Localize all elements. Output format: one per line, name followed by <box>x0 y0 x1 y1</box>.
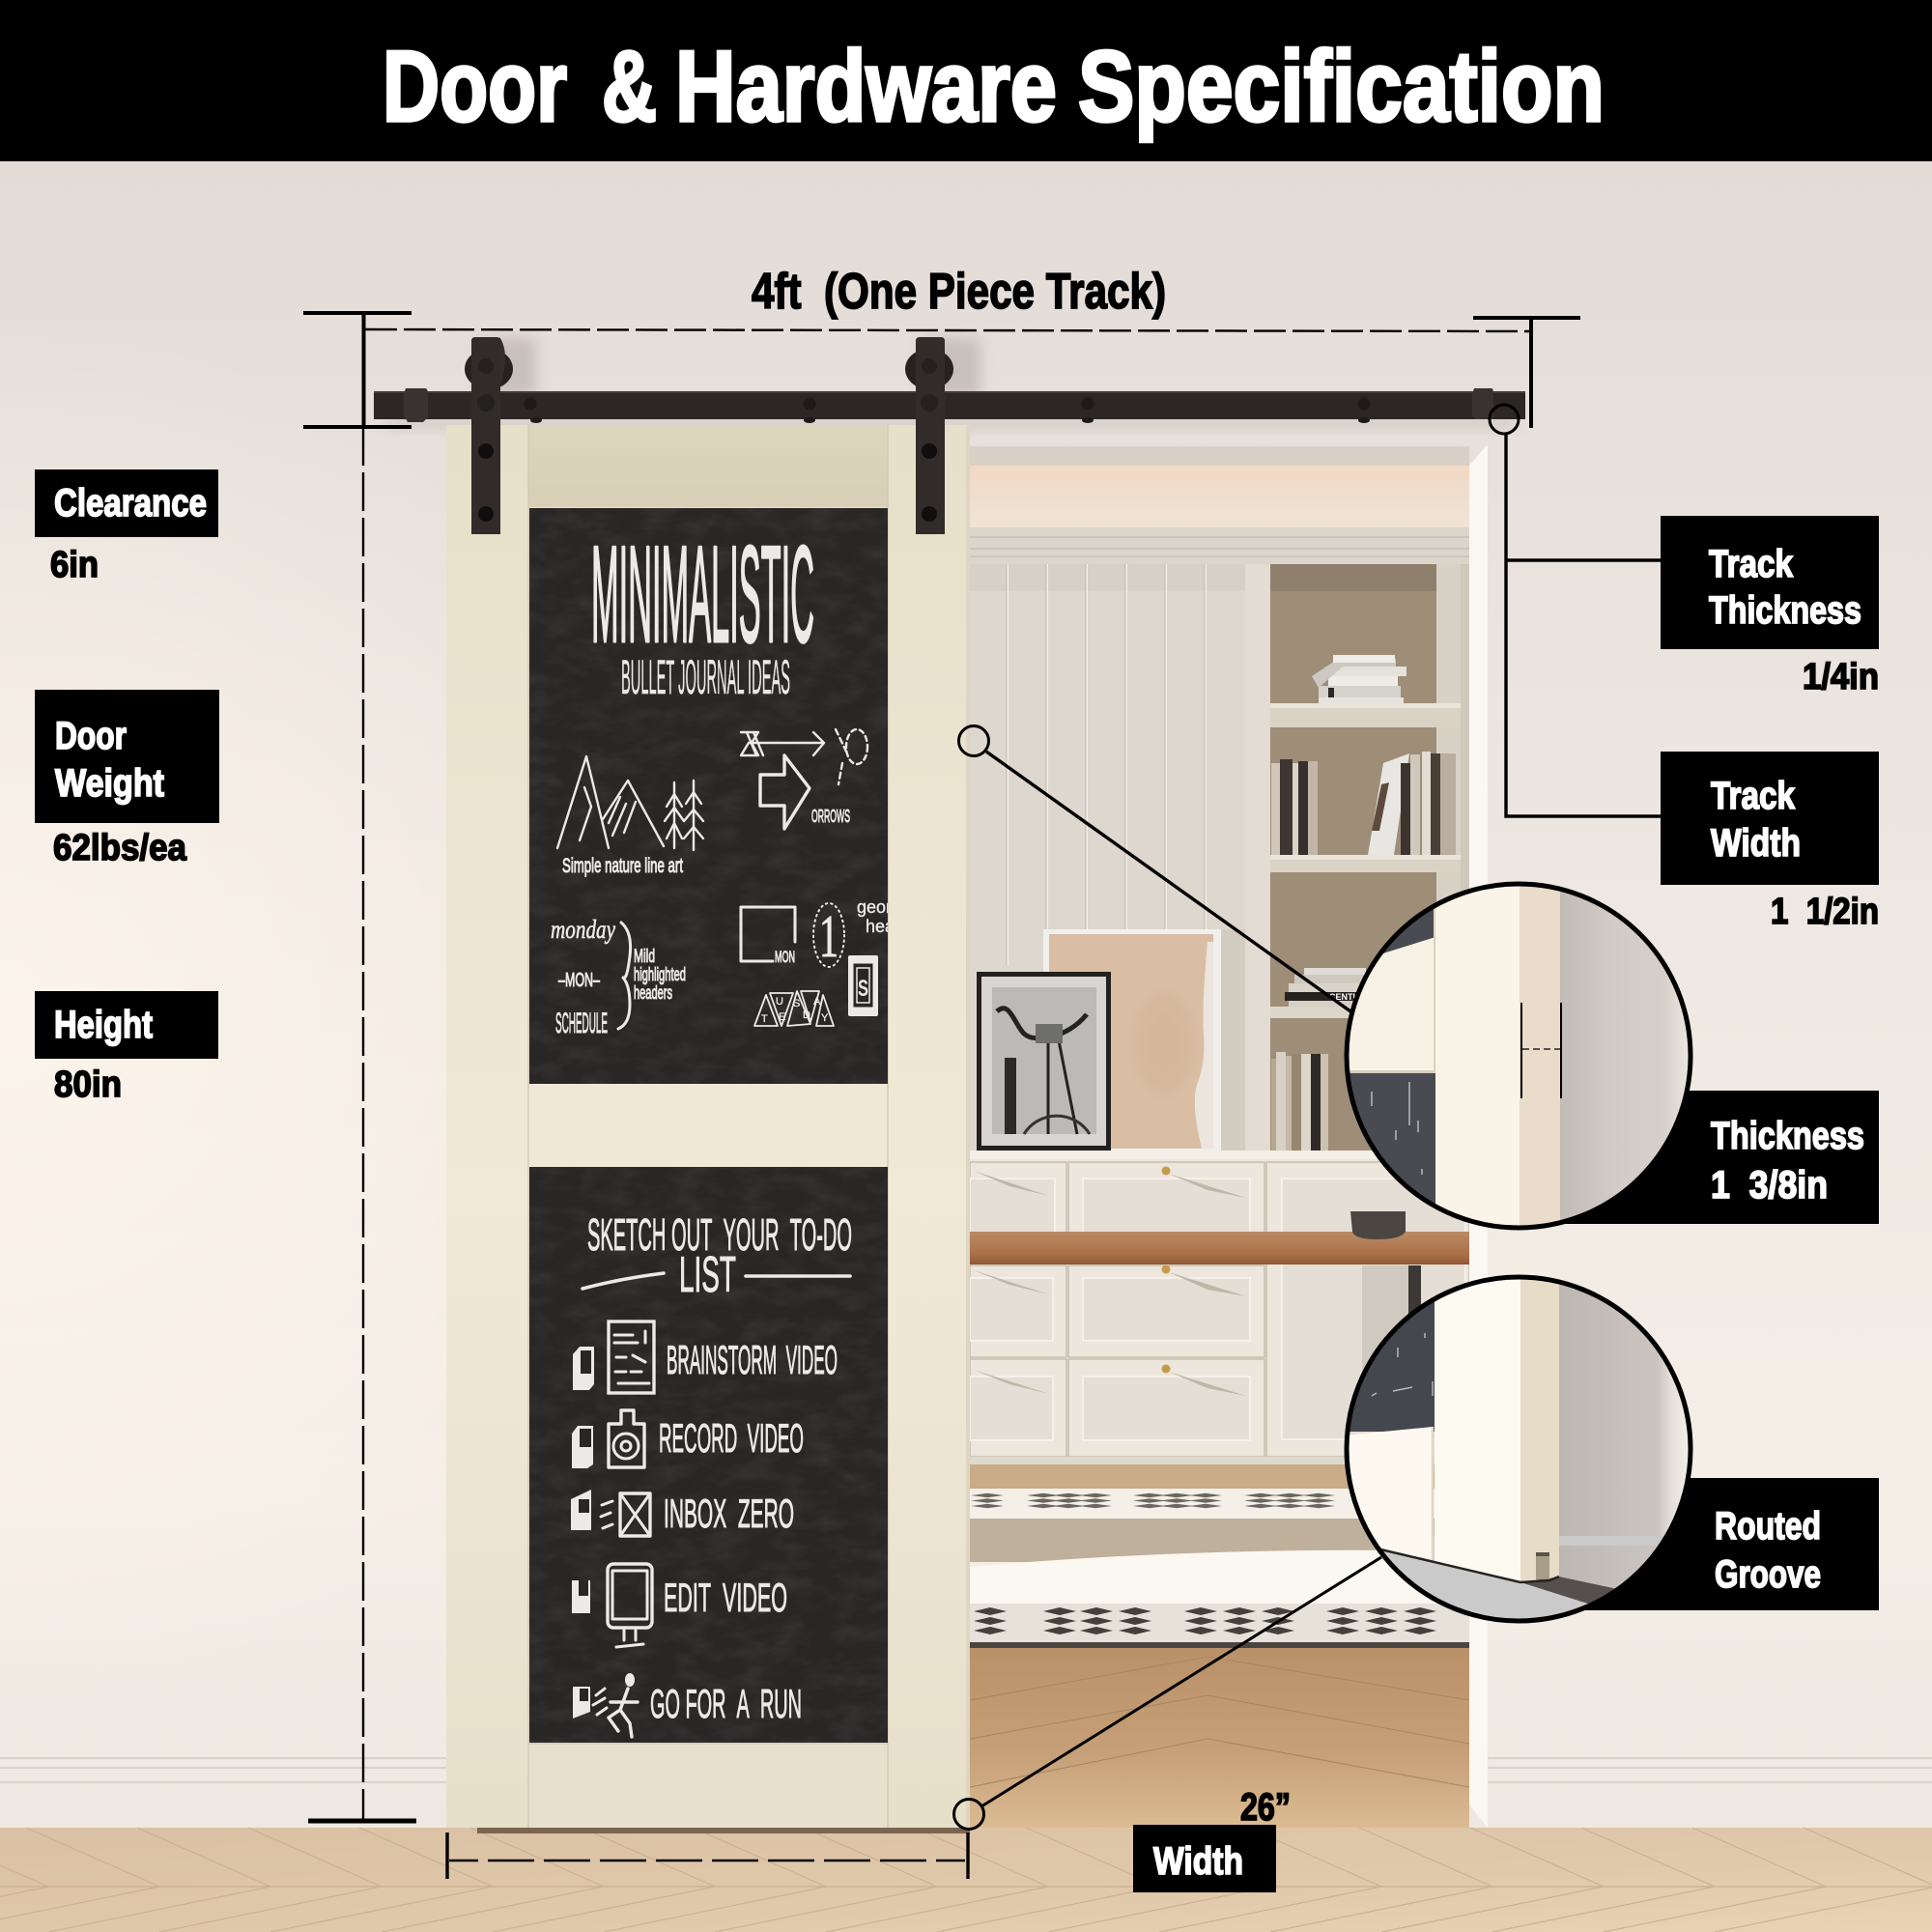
books shelf 4 <box>1271 1052 1328 1151</box>
label: width: Width <box>1153 1840 1243 1883</box>
floor and rug <box>970 1464 1469 1828</box>
detail circle: routed groove <box>1343 1092 1704 1633</box>
label: clearance <box>35 469 218 585</box>
stile in detail <box>1435 1273 1520 1582</box>
bottom rail in detail <box>1343 1427 1433 1560</box>
checkbox and icon: camera <box>572 1410 644 1468</box>
title <box>383 31 1605 143</box>
label: clearance: Clearance <box>54 482 207 525</box>
chalkboard: minimalistic: ORROWS <box>811 807 850 826</box>
label: routed groove: Groove <box>1715 1553 1821 1596</box>
text: MINIMALISTIC <box>591 518 814 671</box>
leader: routed groove detail <box>954 1557 1381 1830</box>
doodle: mon box: MON <box>775 948 795 966</box>
label: track thickness: Thickness <box>1709 589 1861 632</box>
chalkboard: to-do list: RECORD VIDEO <box>659 1415 804 1461</box>
doodle: tuesday pennants: U <box>776 996 783 1008</box>
chalkboard: minimalistic: SCHEDULE <box>555 1008 608 1039</box>
dimension: door height <box>362 427 364 1821</box>
books shelf 3: CENTU <box>1329 992 1359 1002</box>
drawer handle shadows <box>974 1171 1246 1396</box>
title: & <box>602 31 657 143</box>
dimension: track length <box>365 264 1580 428</box>
doodle: brace <box>618 923 631 1029</box>
door middle rail <box>528 1084 888 1166</box>
label: track width <box>1661 752 1879 932</box>
door top rail <box>528 425 888 507</box>
detail circle: door thickness <box>1343 879 1695 1233</box>
label: track width: Width <box>1711 822 1801 865</box>
framed bicycle photo <box>977 972 1111 1151</box>
sliding door <box>446 425 970 1828</box>
label: routed groove <box>1546 1478 1879 1610</box>
value: door weight: 62lbs/ea <box>53 828 187 868</box>
label: track length: 4ft (One Piece Track) <box>752 264 1166 320</box>
routed groove notch <box>1536 1552 1549 1579</box>
value: width: 26” <box>1240 1786 1291 1829</box>
chalkboard: minimalistic <box>529 508 933 1084</box>
title: Door <box>383 31 567 143</box>
door bottom rail <box>528 1744 888 1828</box>
books shelf 2 <box>1271 752 1456 855</box>
value: height: 80in <box>54 1065 122 1105</box>
lettering: geometric headers (cropped): geometric <box>857 897 933 917</box>
header bar <box>0 0 1932 161</box>
value: clearance: 6in <box>50 545 99 585</box>
doodle: tuesday pennants: E <box>779 1011 785 1023</box>
checkbox and icon: brainstorm <box>573 1321 654 1393</box>
door shadow on floor <box>477 1828 970 1833</box>
label: thickness <box>1546 1091 1879 1224</box>
right stopper <box>1472 388 1493 419</box>
label: door weight: Door <box>55 715 127 757</box>
sliding door: SKETCH OUT YOUR TO-DO <box>587 1209 852 1260</box>
dimension: clearance bracket <box>303 313 412 427</box>
lettering: geometric headers (cropped): headers <box>866 917 928 936</box>
baseboard <box>0 1758 1932 1782</box>
caption: simple nature line art: Simple nature line art <box>562 855 683 877</box>
door edge in detail <box>1520 1273 1559 1582</box>
books shelf 3 <box>1285 968 1366 1007</box>
checkbox and icon: monitor <box>572 1564 652 1647</box>
list underlines <box>582 1273 850 1289</box>
doodle: tuesday pennants: T <box>761 1013 768 1025</box>
doodle: dotted number one <box>813 903 844 970</box>
doodle: tuesday pennants: Y <box>821 1012 829 1024</box>
watercolor frame <box>1043 929 1245 1151</box>
floor in detail <box>1343 1536 1704 1633</box>
title: Hardware <box>675 31 1057 143</box>
label: track thickness: Track <box>1709 543 1794 585</box>
doodle: tuesday pennants: A <box>813 996 821 1008</box>
lettering: mild highlighted headers: Mild <box>634 947 655 967</box>
doodle: mountains and trees <box>557 756 703 850</box>
books shelf 1 <box>1312 655 1406 703</box>
lettering: monday: monday <box>551 915 615 944</box>
chalkboard: to-do list <box>529 1167 888 1743</box>
doodle: tuesday pennants <box>754 991 834 1026</box>
chalkboard: minimalistic: BULLET JOURNAL IDEAS <box>621 650 790 704</box>
leader: track callouts <box>1490 405 1661 816</box>
title: Specification <box>1078 31 1605 143</box>
lower cabinets <box>970 1151 1469 1464</box>
label: door weight <box>35 690 219 868</box>
floor <box>0 1828 1932 1932</box>
label: thickness: Thickness <box>1711 1115 1864 1157</box>
leader: thickness detail <box>958 726 1350 1011</box>
label: thickness: 1 3/8in <box>1711 1164 1828 1207</box>
mug <box>1350 1211 1406 1239</box>
hanger shadow on wall <box>386 338 1517 427</box>
lettering: mild highlighted headers <box>634 947 686 1004</box>
doodle: mon box <box>741 907 795 966</box>
label: track width: Track <box>1711 775 1796 817</box>
barn door track <box>374 388 1525 423</box>
lettering: geometric headers (cropped) <box>857 897 933 936</box>
label: door weight: Weight <box>55 762 164 805</box>
lettering: mild highlighted headers: highlighted <box>634 965 686 985</box>
chalkboard: to-do list: INBOX ZERO <box>664 1491 794 1536</box>
doodle: arrows <box>741 729 867 829</box>
list item: edit video: EDIT VIDEO <box>664 1575 787 1620</box>
value: track width: 1 1/2in <box>1771 892 1879 932</box>
dimension: door width <box>447 1833 969 1879</box>
door frame jamb <box>1469 446 1488 1828</box>
bookcase <box>1245 564 1469 1151</box>
checkbox and icon: runner <box>573 1673 638 1737</box>
label: track thickness <box>1661 516 1879 697</box>
value: track thickness: 1/4in <box>1803 657 1879 697</box>
left stopper <box>404 388 428 422</box>
lettering: mild highlighted headers: headers <box>634 983 672 1004</box>
beadboard wall <box>970 564 1245 1151</box>
label: height <box>35 991 218 1105</box>
doodle: tuesday pennants: S <box>793 998 800 1009</box>
doodle: s badge: S <box>858 976 868 1002</box>
lettering: mon: –MON– <box>558 970 601 991</box>
chalkboard: to-do list: GO FOR A RUN <box>650 1681 802 1726</box>
heading: list: LIST <box>679 1247 736 1303</box>
checkbox and icon: envelope <box>571 1490 650 1536</box>
doodle: dotted number one: 1 <box>819 904 838 970</box>
rug diamonds <box>971 1493 1335 1508</box>
chalkboard: to-do list: BRAINSTORM VIDEO <box>667 1337 838 1382</box>
right hanger <box>905 337 953 534</box>
room seen through doorway <box>970 446 1469 1828</box>
label: width <box>1133 1786 1291 1892</box>
doodle: tuesday pennants: D <box>803 1009 810 1021</box>
label: height: Height <box>54 1004 153 1046</box>
left hanger <box>465 337 513 534</box>
label: routed groove: Routed <box>1715 1505 1821 1548</box>
dimension ticks: thickness <box>1521 1003 1561 1098</box>
wooden desk top <box>970 1232 1469 1264</box>
doodle: s badge <box>848 955 878 1016</box>
track bolts <box>524 398 1370 423</box>
